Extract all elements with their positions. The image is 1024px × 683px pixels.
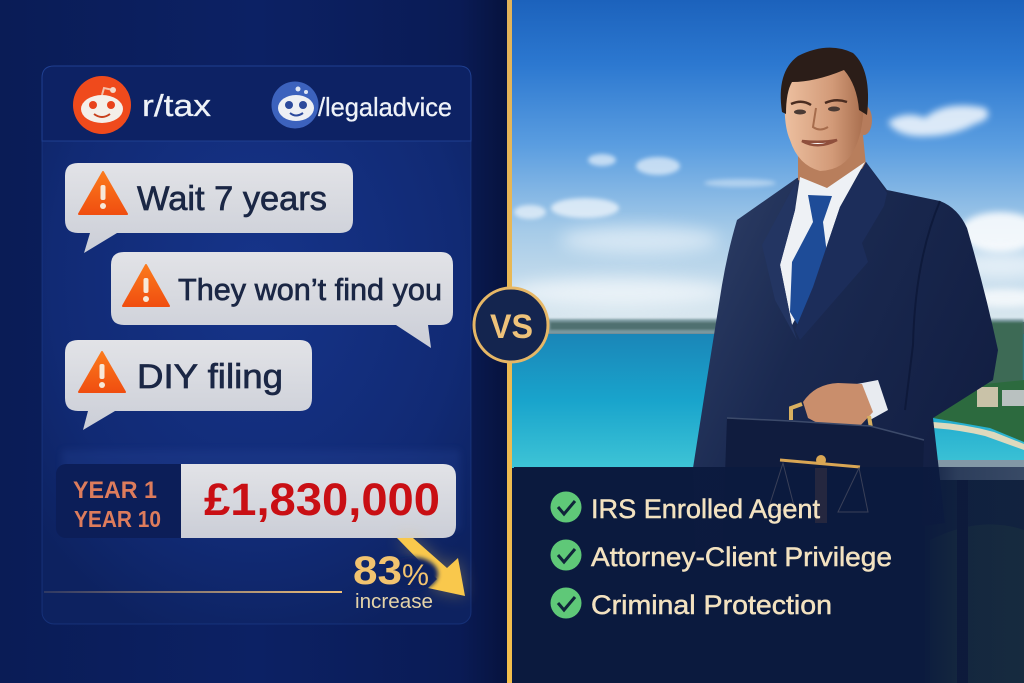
ear [862, 106, 872, 135]
brows [791, 100, 847, 105]
icon: r/tax logo [73, 76, 131, 134]
jacket [693, 162, 998, 480]
icon: warning [79, 172, 127, 214]
smile [802, 140, 837, 145]
shirt cuff [857, 380, 888, 420]
trousers [735, 500, 925, 683]
arrow [397, 538, 465, 596]
sky [510, 0, 1024, 322]
face [785, 68, 864, 171]
figure row [56, 464, 456, 538]
right background scene [510, 0, 1024, 683]
item: Attorney-Client Privilege: Attorney-Client Privilege [591, 542, 892, 572]
divider line [44, 591, 342, 593]
eyes [794, 110, 806, 114]
hair [781, 48, 868, 115]
man [693, 48, 998, 480]
badge: VS: VS [490, 308, 533, 346]
horizon land [510, 319, 1024, 335]
label: YEAR 10: YEAR 10 [74, 506, 161, 532]
speech bubble: DIY filing [65, 340, 312, 430]
speech bubble: They won't find you [111, 252, 453, 348]
stat: 83% increase: increase [355, 591, 433, 613]
hand [803, 383, 873, 427]
item: IRS Enrolled Agent: IRS Enrolled Agent [591, 494, 820, 524]
speech bubble: Wait 7 years [65, 163, 353, 253]
panel: credentials overlay [514, 467, 1024, 683]
text backing [386, 557, 438, 591]
neck [798, 133, 866, 188]
header bar [42, 66, 471, 141]
label: YEAR 1: YEAR 1 [73, 477, 157, 504]
sea [510, 334, 1024, 468]
item: Criminal Protection: Criminal Protection [591, 590, 832, 620]
label: /legaladvice: /legaladvice [318, 92, 452, 122]
icon: warning [79, 352, 125, 392]
stat: 83% increase [353, 549, 433, 613]
speech bubble: DIY filing: DIY filing [137, 358, 283, 396]
icon: warning [123, 265, 169, 306]
briefcase [725, 418, 915, 467]
clouds [510, 106, 1024, 307]
icon: scales of justice [768, 455, 868, 523]
credentials list [550, 492, 892, 620]
left background [0, 0, 511, 683]
nose [813, 108, 828, 130]
briefcase handle [791, 404, 871, 428]
right coast [933, 322, 1024, 450]
shirt [780, 162, 865, 325]
label: r/tax: r/tax [142, 88, 212, 123]
stat: 83% increase: % [402, 559, 429, 592]
speech bubble: Wait 7 years: Wait 7 years [137, 180, 327, 218]
badge: VS [474, 288, 548, 362]
balcony rail [938, 460, 1024, 683]
stat: 83% increase: 83 [353, 549, 402, 593]
icon: legaladvice logo [272, 82, 318, 128]
speech bubble: They won't find you: They won’t find you [178, 272, 442, 307]
panel: reddit advice [42, 66, 471, 624]
gold divider [507, 0, 512, 683]
band behind figure [62, 450, 460, 530]
tie [790, 195, 832, 335]
amount: £1,830,000 [204, 474, 440, 525]
sleeve seam [905, 201, 940, 410]
lapels [795, 162, 887, 340]
